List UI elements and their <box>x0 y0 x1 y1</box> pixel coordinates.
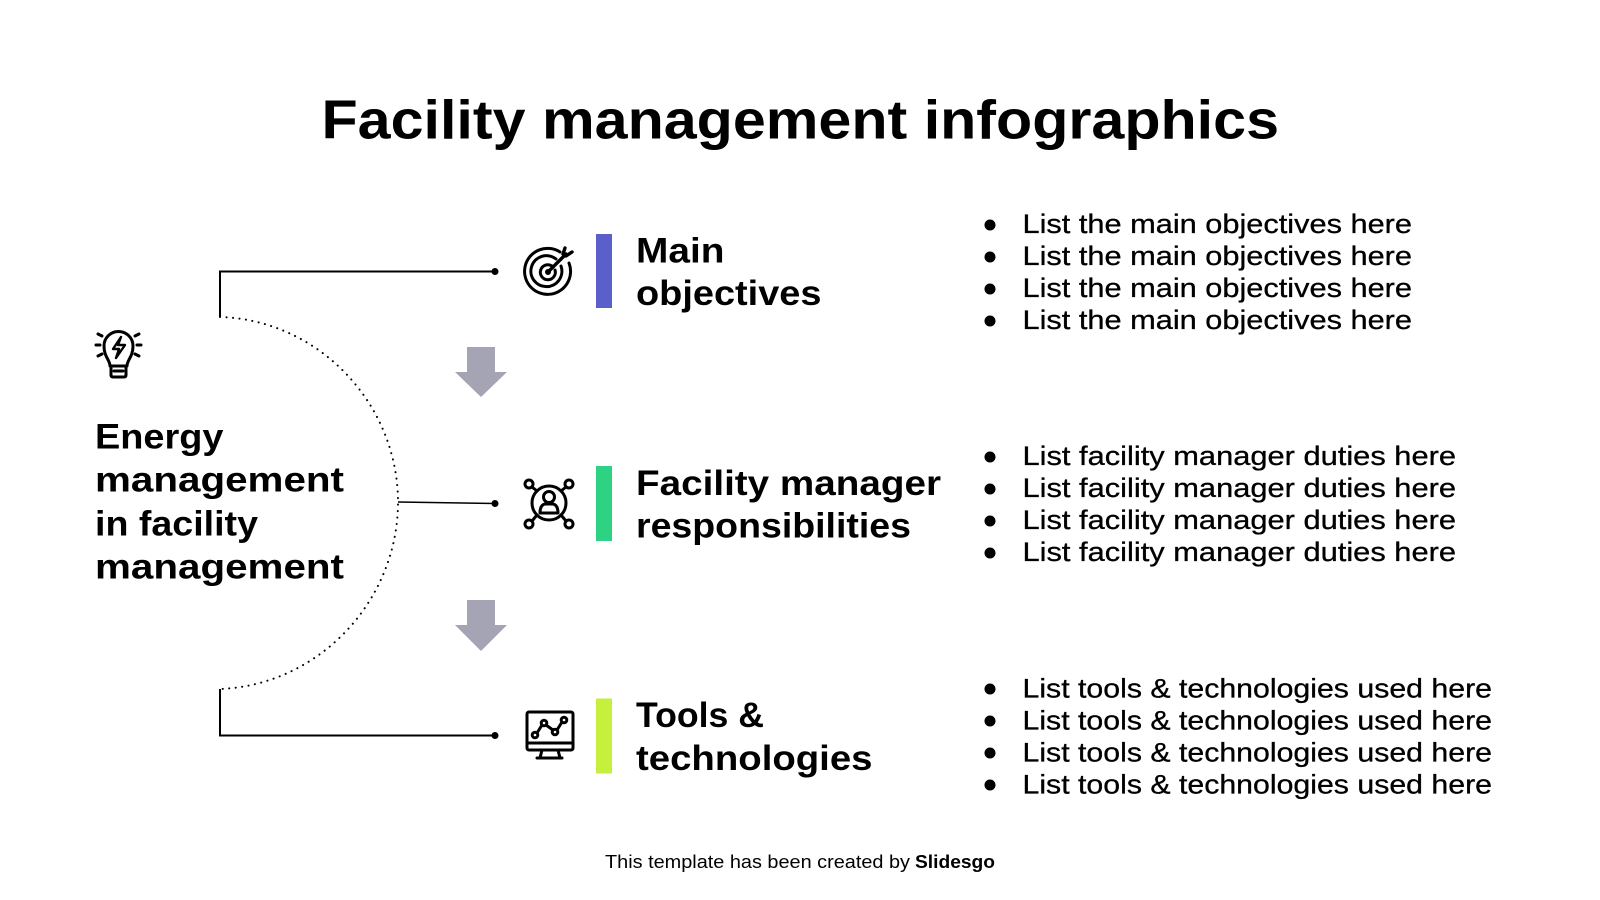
list: objectives: List the main objectives here <box>1022 273 1412 303</box>
icon: manager network <box>525 480 573 528</box>
list: duties <box>984 441 1456 567</box>
connector: top <box>220 268 498 317</box>
footer credit: Slidesgo <box>915 852 995 872</box>
heading: facility manager responsibilities: responsibilities <box>636 506 911 546</box>
icon: light bulb <box>96 332 141 377</box>
connector: bottom <box>220 689 498 739</box>
list: objectives: List the main objectives here <box>1022 209 1412 239</box>
left label: Energy <box>95 416 224 456</box>
heading: main objectives <box>636 230 822 313</box>
bar: purple <box>596 234 612 308</box>
footer credit: This template has been created by <box>605 852 910 872</box>
list: objectives <box>984 209 1412 335</box>
central dotted arc <box>220 317 398 689</box>
icon: monitor chart <box>527 712 573 758</box>
list: tools: List tools & technologies used here <box>1022 738 1492 768</box>
heading: main objectives: Main <box>636 230 724 270</box>
list: duties: List facility manager duties here <box>1022 441 1456 471</box>
heading: main objectives: objectives <box>636 273 822 313</box>
list: duties: List facility manager duties here <box>1022 505 1456 535</box>
connector: middle <box>398 500 498 507</box>
list: tools: List tools & technologies used here <box>1022 770 1492 800</box>
list: duties: List facility manager duties here <box>1022 473 1456 503</box>
left label: management <box>95 546 344 586</box>
bar: lime <box>596 698 612 774</box>
icon: target <box>525 248 572 294</box>
heading: tools and technologies <box>636 695 872 778</box>
list: tools: List tools & technologies used here <box>1022 706 1492 736</box>
list: tools: List tools & technologies used here <box>1022 674 1492 704</box>
arrow: down 2 <box>455 600 507 651</box>
arrow: down 1 <box>455 347 507 397</box>
left label: in facility <box>95 504 258 544</box>
title: Facility management infographics <box>322 88 1279 150</box>
bar: green <box>596 466 612 541</box>
heading: tools and technologies: technologies <box>636 738 872 778</box>
list: duties: List facility manager duties here <box>1022 537 1456 567</box>
left label: management <box>95 460 344 500</box>
list: objectives: List the main objectives here <box>1022 241 1412 271</box>
left label <box>95 416 344 586</box>
list: objectives: List the main objectives here <box>1022 305 1412 335</box>
heading: tools and technologies: Tools & <box>636 695 764 735</box>
list: tools <box>984 674 1492 800</box>
heading: facility manager responsibilities <box>636 463 941 546</box>
heading: facility manager responsibilities: Facility manager <box>636 463 941 503</box>
